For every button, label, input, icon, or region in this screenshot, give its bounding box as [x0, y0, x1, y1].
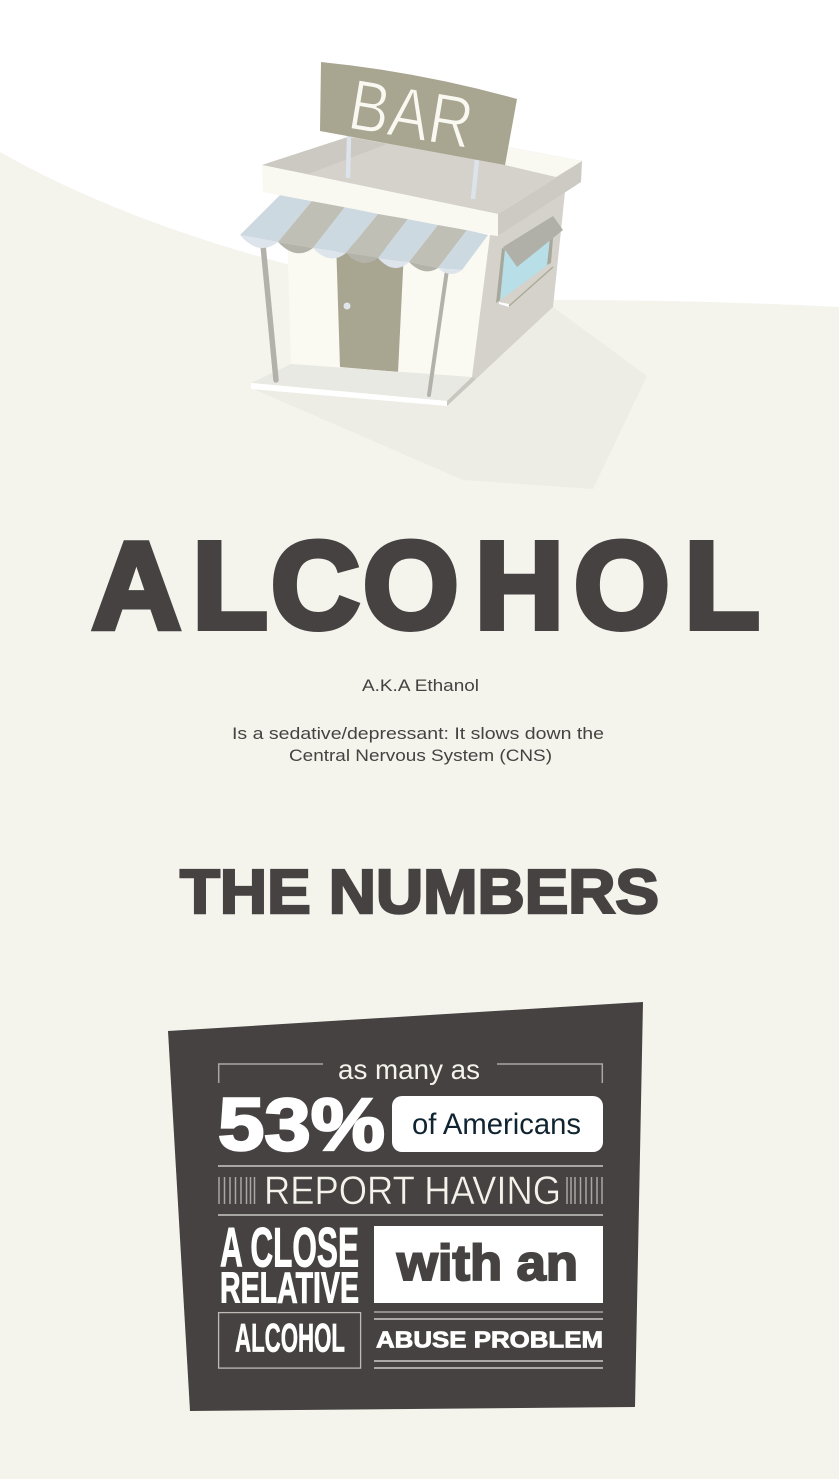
- abuse problem: ABUSE PROBLEM: [376, 1326, 603, 1352]
- panel: statistic: [168, 1002, 643, 1411]
- striped awning: [240, 195, 488, 274]
- side wall: [472, 192, 565, 379]
- subtitle: also known as: A.K.A Ethanol: [362, 676, 479, 695]
- report having band: REPORT HAVING: [264, 1169, 561, 1213]
- with an box: with an: [396, 1235, 578, 1291]
- roof: [262, 137, 582, 236]
- title: ALCOHOL: [92, 518, 760, 655]
- bracket with as many as: [219, 1054, 602, 1085]
- alcohol box: ALCOHOL: [235, 1316, 345, 1360]
- bracket with as many as: as many as: [338, 1054, 480, 1085]
- alcohol box: [219, 1313, 361, 1368]
- front wall: [286, 195, 490, 377]
- a close relative: RELATIVE: [220, 1264, 359, 1312]
- a close relative: [220, 1216, 359, 1312]
- porch floor: [251, 364, 476, 406]
- with an box: [374, 1226, 603, 1303]
- a close relative: A CLOSE: [220, 1216, 359, 1278]
- sign posts: [348, 136, 477, 199]
- building shadow: [253, 307, 647, 489]
- description text: [232, 724, 604, 765]
- description text: Central Nervous System (CNS): [289, 746, 552, 765]
- side window: [496, 216, 563, 307]
- description text: Is a sedative/depressant: It slows down the: [232, 724, 604, 743]
- porch poles: [263, 245, 447, 395]
- door: [336, 240, 404, 372]
- of Americans badge: [392, 1096, 603, 1152]
- of Americans badge: of Americans: [412, 1108, 581, 1141]
- big number: 53%: [218, 1083, 385, 1166]
- section heading: the numbers: THE NUMBERS: [180, 858, 659, 927]
- illustration: bar building: [240, 62, 647, 489]
- bar sign: BAR: [343, 65, 479, 164]
